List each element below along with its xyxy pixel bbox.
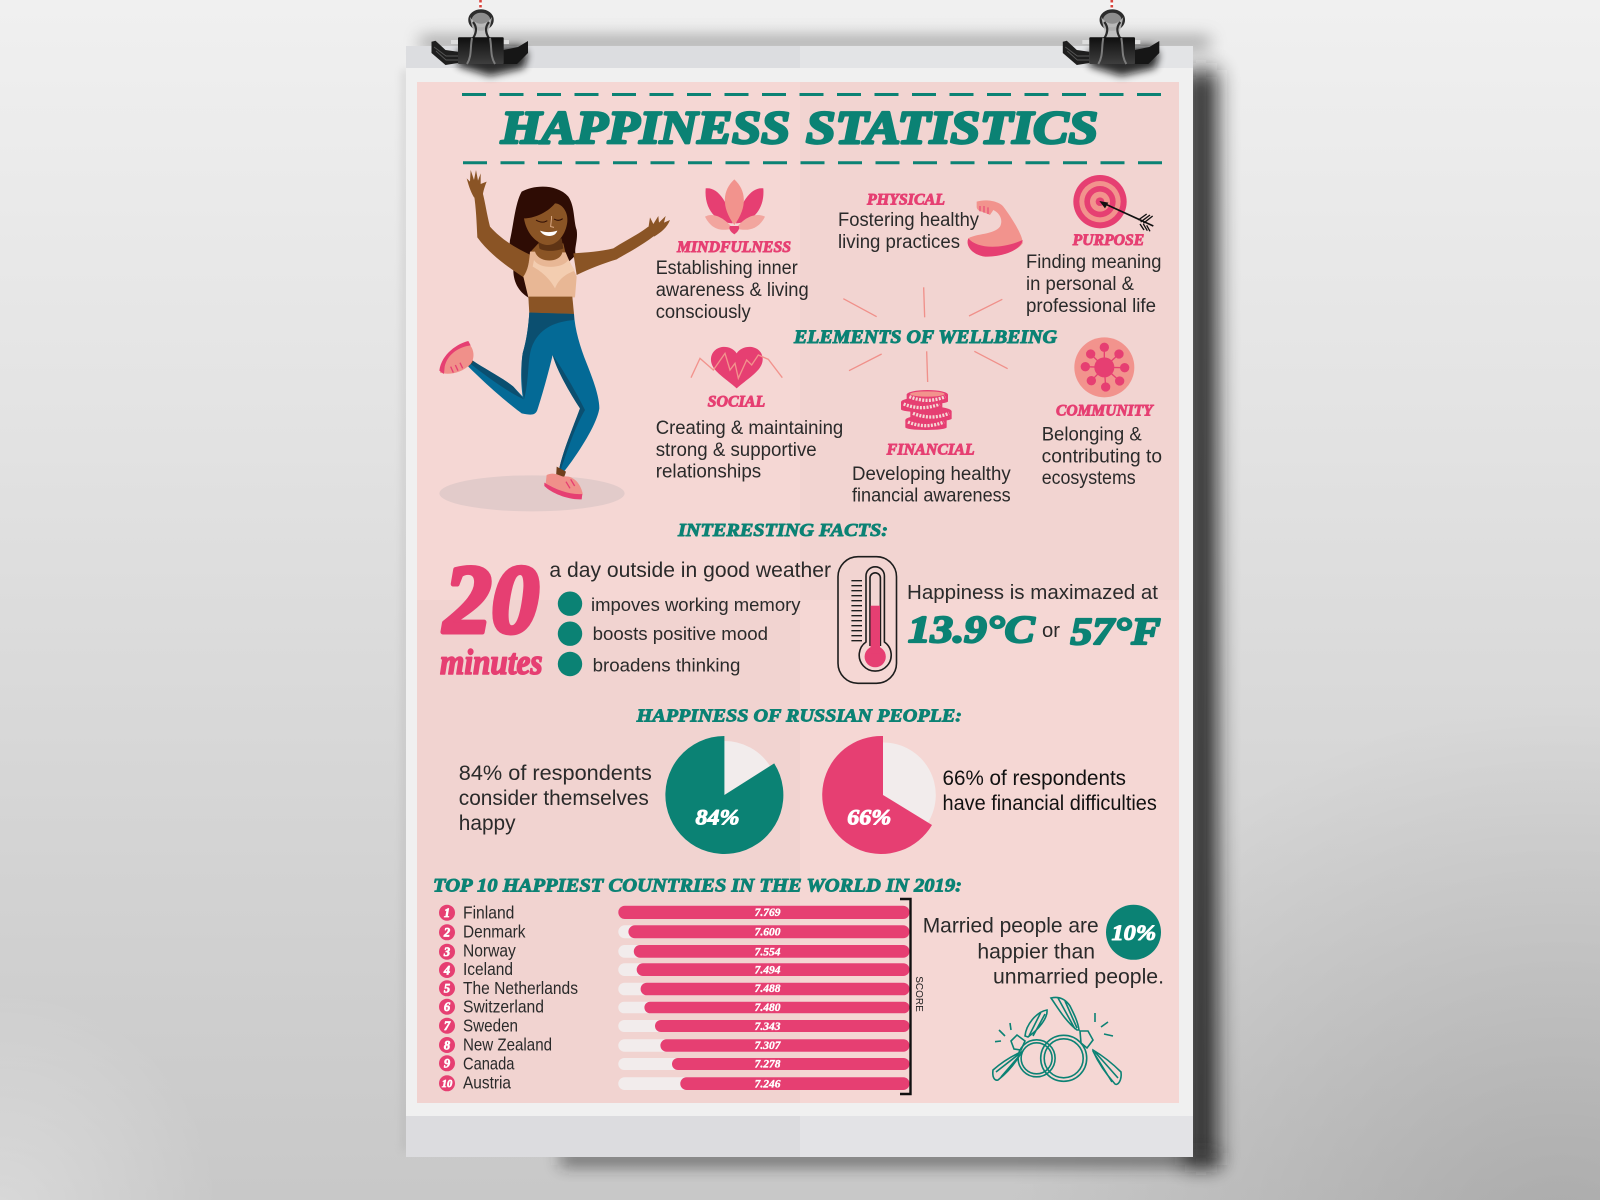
- icon: flexed arm: [968, 200, 1023, 257]
- heading: elements of wellbeing with rays: [793, 287, 1058, 382]
- fact list: outdoor benefits: [549, 558, 831, 676]
- element: financial: financial awareness: [852, 486, 1011, 507]
- element: financial: FINANCIAL: [886, 442, 975, 459]
- row: Canada: 7.278: [755, 1058, 781, 1070]
- element: physical: [838, 192, 1023, 257]
- poster sheet: [406, 46, 1193, 1157]
- element: community: ecosystems: [1042, 468, 1136, 489]
- stat: 66 percent financial difficulties: 66% of respondents: [942, 766, 1126, 790]
- element: community: Belonging &: [1042, 425, 1142, 446]
- row: Norway: Norway: [463, 941, 516, 961]
- element: purpose: in personal &: [1026, 274, 1134, 295]
- clip: left: [432, 0, 528, 76]
- icon: coin stack: [901, 390, 952, 430]
- badge: 10%: [1106, 905, 1161, 960]
- fact: married people: Married people are: [923, 914, 1099, 938]
- fact list: outdoor benefits: impoves working memory: [591, 594, 801, 615]
- row: Iceland: Iceland: [463, 959, 513, 979]
- stat: 84 percent happy: consider themselves: [459, 786, 649, 810]
- row: New Zealand: 7.307: [755, 1040, 782, 1052]
- illustration: dancing woman: [439, 170, 670, 511]
- clip: right: [1063, 0, 1159, 76]
- icon: heart with pulse: [691, 347, 782, 388]
- icon: thermometer: [838, 557, 896, 683]
- row: Canada: Canada: [463, 1054, 515, 1074]
- stat: 66 percent financial difficulties: [822, 736, 1157, 854]
- row: Switzerland: [439, 997, 910, 1017]
- fact: optimal temperature: 57°F: [1070, 611, 1160, 653]
- row: New Zealand: New Zealand: [463, 1035, 552, 1055]
- row: Denmark: 2: [443, 926, 450, 940]
- fact: optimal temperature: 13.9°C: [908, 609, 1035, 651]
- row: The Netherlands: [439, 978, 910, 998]
- row: Iceland: 7.494: [755, 964, 781, 976]
- row: Denmark: [439, 921, 910, 941]
- badge: 10%: 10%: [1112, 920, 1156, 945]
- row: Finland: [439, 902, 910, 922]
- row: Sweden: 7: [444, 1019, 451, 1033]
- icon: wedding rings: [993, 997, 1121, 1084]
- element: mindfulness: [656, 179, 809, 323]
- row: Sweden: 7.343: [755, 1021, 781, 1033]
- row: The Netherlands: 5: [444, 982, 450, 996]
- element: financial: [852, 390, 1011, 507]
- row: Austria: 7.246: [755, 1078, 781, 1090]
- row: New Zealand: 8: [444, 1038, 451, 1052]
- pie chart: 84%: 84%: [696, 804, 740, 830]
- fact list: outdoor benefits: broadens thinking: [593, 655, 740, 676]
- title: [462, 94, 1163, 163]
- title: HAPPINESS: [500, 102, 790, 154]
- row: Austria: Austria: [463, 1072, 511, 1092]
- row: Norway: [439, 941, 910, 961]
- element: social: Creating & maintaining: [656, 418, 843, 439]
- element: physical: PHYSICAL: [867, 192, 945, 209]
- row: Finland: 7.769: [755, 907, 781, 919]
- title: STATISTICS: [806, 102, 1098, 154]
- stat: 84 percent happy: 84% of respondents: [459, 761, 652, 785]
- element: social: strong & supportive: [656, 440, 817, 461]
- chart: country ranking bars: [439, 899, 924, 1094]
- stat: 84 percent happy: happy: [459, 811, 516, 835]
- row: Iceland: [439, 959, 910, 979]
- element: community: contributing to: [1042, 447, 1162, 468]
- element: social: SOCIAL: [708, 394, 765, 411]
- element: mindfulness: MINDFULNESS: [676, 239, 791, 256]
- element: physical: living practices: [838, 232, 960, 253]
- icon: target with arrow: [1073, 175, 1153, 231]
- element: purpose: Finding meaning: [1026, 252, 1162, 273]
- element: social: [656, 347, 843, 483]
- fact: 20 minutes: 20: [442, 546, 539, 654]
- row: New Zealand: [439, 1035, 910, 1055]
- fact: married people: [923, 905, 1164, 988]
- row: Denmark: 7.600: [755, 926, 781, 938]
- binder clips: [432, 0, 1159, 76]
- heading: top 10 countries: TOP 10 HAPPIEST COUNTRIES IN THE WORLD IN 2019:: [433, 877, 962, 897]
- row: Sweden: [439, 1016, 910, 1036]
- axis bracket: score: SCORE: [913, 976, 924, 1012]
- element: mindfulness: awareness & living: [656, 280, 809, 301]
- row: Denmark: Denmark: [463, 921, 526, 941]
- fact: optimal temperature: Happiness is maximazed at: [907, 582, 1158, 604]
- element: purpose: [1026, 175, 1162, 317]
- row: Norway: 3: [443, 945, 450, 959]
- element: community: COMMUNITY: [1056, 403, 1154, 420]
- row: The Netherlands: 7.488: [755, 983, 781, 995]
- element: purpose: professional life: [1026, 296, 1156, 317]
- element: social: relationships: [656, 462, 761, 483]
- row: Canada: 9: [444, 1057, 451, 1071]
- row: Norway: 7.554: [755, 946, 781, 958]
- fact: optimal temperature: [907, 582, 1160, 653]
- axis bracket: score: [900, 899, 924, 1094]
- row: Sweden: Sweden: [463, 1016, 518, 1036]
- fact: optimal temperature: or: [1042, 620, 1060, 642]
- row: Austria: [439, 1072, 910, 1092]
- element: financial: Developing healthy: [852, 464, 1011, 485]
- element: mindfulness: consciously: [656, 302, 751, 323]
- row: Iceland: 4: [443, 963, 450, 977]
- row: The Netherlands: The Netherlands: [463, 978, 578, 998]
- element: physical: Fostering healthy: [838, 210, 979, 231]
- icon: community network: [1074, 337, 1134, 397]
- fact list: outdoor benefits: a day outside in good weather: [549, 558, 831, 582]
- row: Canada: [439, 1054, 910, 1074]
- pie chart: 66%: [822, 736, 936, 854]
- element: community: [1042, 337, 1162, 489]
- heading: elements of wellbeing with rays: ELEMENTS OF WELLBEING: [793, 328, 1058, 348]
- pie chart: 84%: [665, 736, 783, 854]
- stat: 84 percent happy: [459, 736, 783, 854]
- row: Switzerland: Switzerland: [463, 997, 544, 1017]
- poster shadow: [402, 36, 1220, 1166]
- element: purpose: PURPOSE: [1073, 232, 1144, 249]
- heading: interesting facts: INTERESTING FACTS:: [677, 520, 888, 540]
- fact: married people: happier than: [977, 939, 1095, 963]
- icon: lotus: [705, 179, 765, 234]
- row: Finland: 1: [444, 906, 450, 920]
- row: Switzerland: 7.480: [755, 1002, 781, 1014]
- fact list: outdoor benefits: boosts positive mood: [593, 623, 768, 644]
- row: Switzerland: 6: [444, 1000, 451, 1014]
- row: Austria: 10: [442, 1079, 453, 1090]
- pie chart: 66%: 66%: [847, 804, 891, 830]
- fact: 20 minutes: minutes: [440, 642, 543, 682]
- stat: 66 percent financial difficulties: have financial difficulties: [942, 791, 1157, 815]
- heading: happiness of russian people: HAPPINESS OF RUSSIAN PEOPLE:: [636, 706, 962, 726]
- element: mindfulness: Establishing inner: [656, 258, 798, 279]
- fact: married people: unmarried people.: [993, 964, 1164, 988]
- row: Finland: Finland: [463, 902, 514, 922]
